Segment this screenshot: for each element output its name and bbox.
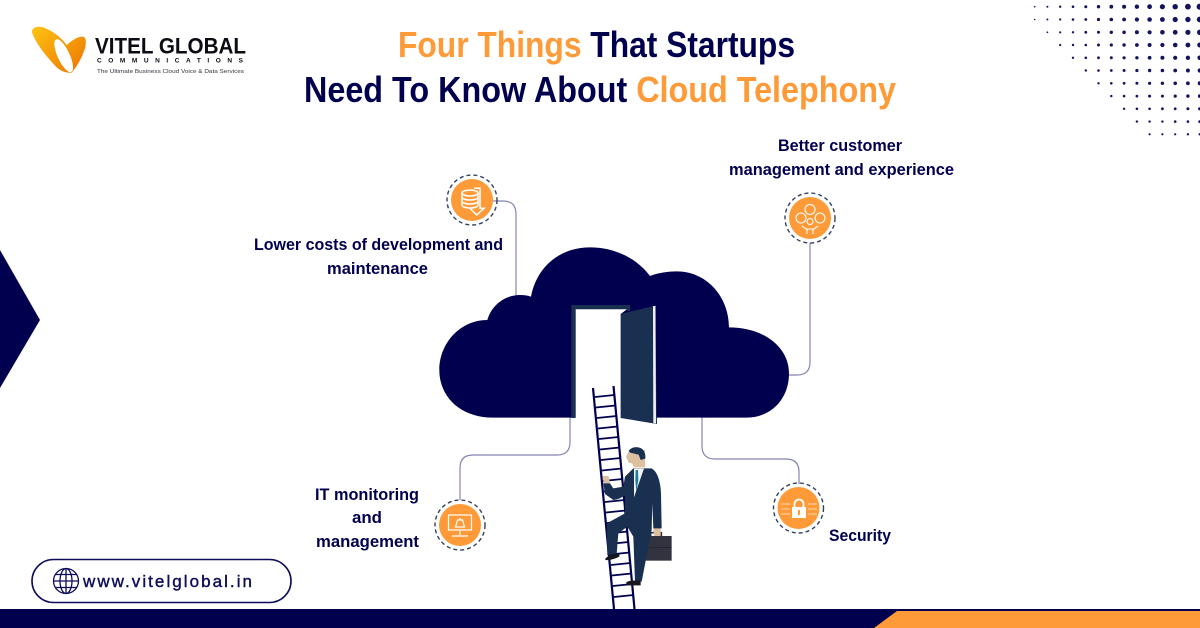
shirt [634, 469, 644, 497]
shoes [605, 553, 641, 585]
website url: www.vitelglobal.in [82, 572, 252, 591]
logo tagline: The Ultimate Business Cloud Voice & Data Services [97, 69, 244, 75]
ladder rungs [595, 395, 634, 597]
logo subtitle: COMMUNICATIONS [97, 58, 244, 64]
label: IT monitoring [315, 485, 419, 551]
decorative dot grid [1034, 4, 1200, 135]
label: lower costs: Lower costs of development and [254, 235, 503, 254]
label: IT monitoring: management [316, 532, 419, 551]
title line 2: Need To Know About Cloud Telephony [304, 69, 896, 110]
left edge arrow [0, 250, 40, 388]
cloud [439, 247, 789, 418]
label: security: Security [829, 526, 891, 545]
point: lower costs [254, 175, 503, 278]
hands and face [603, 450, 661, 536]
logo mark [32, 27, 86, 75]
logo: Vitel Global [32, 27, 246, 75]
briefcase [644, 533, 672, 561]
point: security [774, 483, 891, 545]
icon: globe [54, 568, 78, 594]
icon: monitor with alert [435, 500, 485, 550]
label: lower costs: maintenance [327, 259, 428, 278]
connector lines [460, 201, 810, 500]
ladder [593, 386, 634, 609]
door edge highlight [653, 306, 656, 424]
website pill [32, 560, 291, 602]
hair [629, 447, 645, 460]
icon: padlock [774, 483, 824, 533]
door frame [571, 305, 630, 418]
title line 1: Four Things That Startups [398, 24, 795, 65]
label: customer experience: management and experience [729, 160, 954, 179]
title [304, 24, 896, 110]
door [571, 305, 657, 424]
door opening [576, 309, 627, 418]
icon: customer with ratings [785, 193, 835, 243]
orange accent [874, 611, 1200, 628]
icon: database cost down [447, 175, 497, 225]
suit [603, 468, 662, 582]
footer bar [0, 609, 1200, 628]
point: customer experience [729, 136, 954, 243]
point: IT monitoring [315, 485, 485, 551]
pill outline [32, 560, 291, 602]
tie [635, 470, 638, 492]
ladder rails [593, 386, 634, 609]
door leaf [621, 306, 657, 424]
label: IT monitoring: IT monitoring [315, 485, 419, 504]
label: IT monitoring: and [352, 508, 382, 527]
businessman climbing with briefcase [603, 447, 672, 585]
label: customer experience [729, 136, 954, 179]
logo wordmark: VITEL GLOBAL [95, 34, 246, 58]
label: customer experience: Better customer [778, 136, 902, 155]
navy band [0, 609, 1200, 628]
label: lower costs [254, 235, 503, 278]
